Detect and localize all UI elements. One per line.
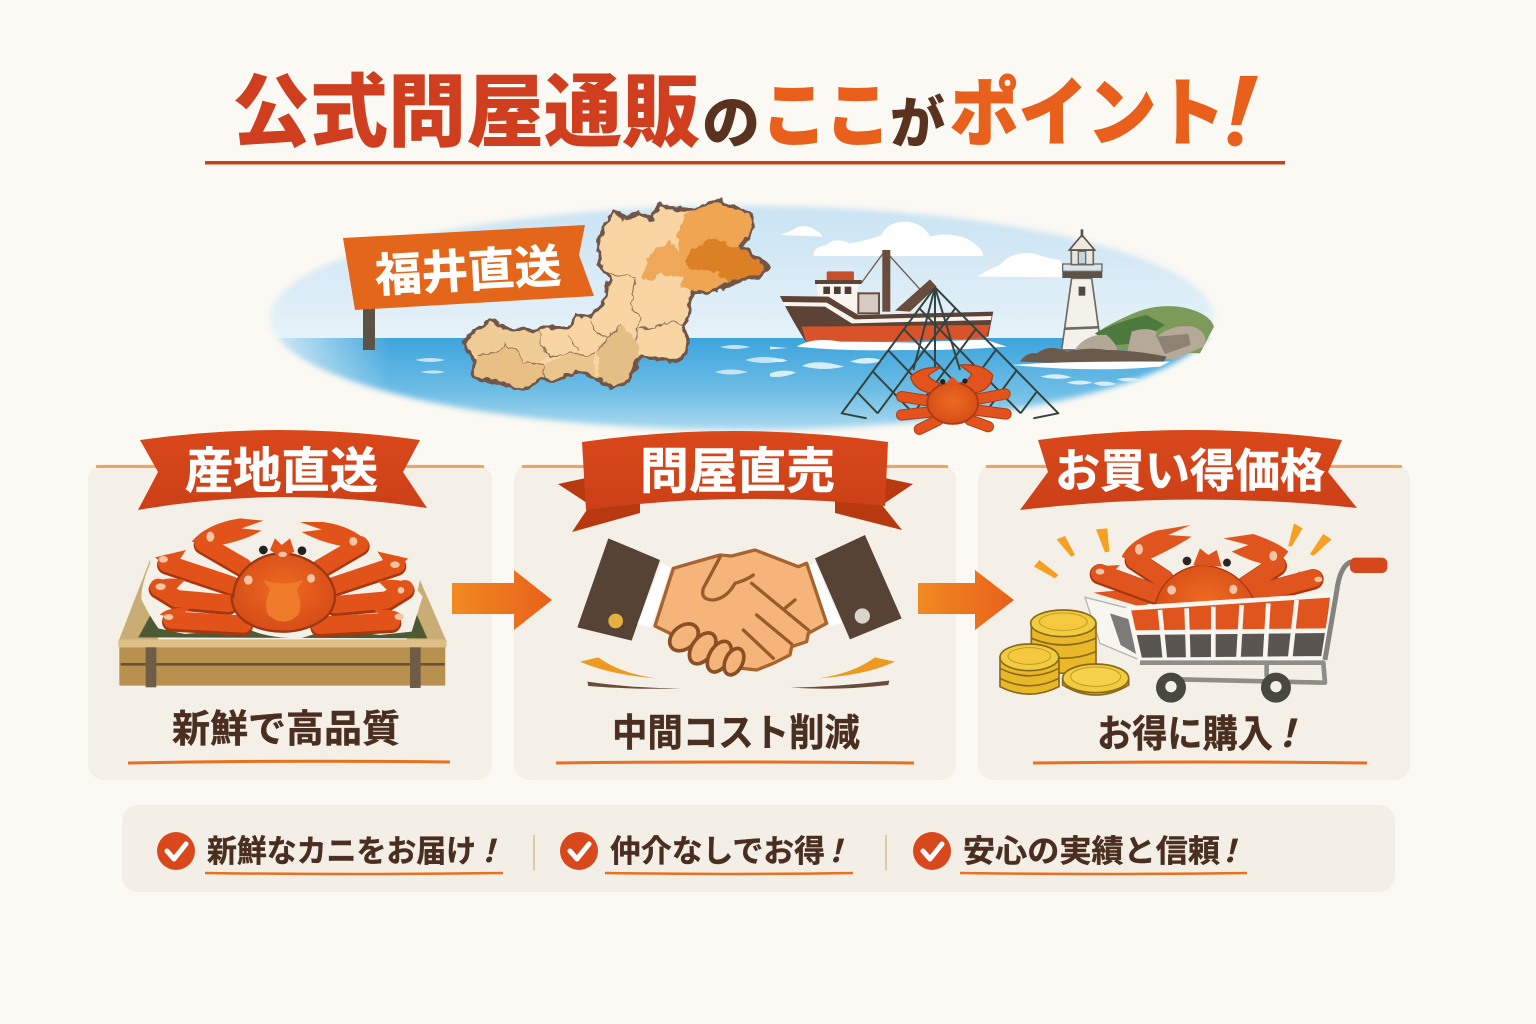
caption: buy at a bargain bbox=[1033, 714, 1367, 763]
title: ポイント bbox=[950, 72, 1225, 155]
lighthouse bbox=[1062, 229, 1102, 350]
benefit: fresh crab delivered bbox=[157, 832, 504, 874]
caption: buy at a bargain: お得に購入 bbox=[1097, 714, 1273, 756]
ribbon: bargain price: お買い得価格 bbox=[1055, 445, 1325, 497]
ribbon: wholesaler direct sale: 問屋直売 bbox=[640, 445, 835, 499]
benefit: reliable track record: 安心の実績と信頼 bbox=[963, 834, 1220, 869]
benefit: fresh crab delivered: ！ bbox=[473, 834, 504, 869]
caption: fresh and high quality: 新鮮で高品質 bbox=[172, 709, 400, 751]
benefit: savings without middleman: ！ bbox=[820, 834, 851, 869]
boat bbox=[780, 250, 1007, 350]
ribbon: wholesaler direct sale bbox=[558, 431, 913, 532]
map of Fukui bbox=[463, 200, 768, 390]
title: の bbox=[702, 91, 760, 156]
crab legs shadow bbox=[158, 545, 405, 627]
arrow: origin to wholesaler bbox=[452, 570, 552, 630]
sky and sea oval bbox=[260, 200, 1230, 436]
sign: Fukui direct: 福井直送 bbox=[374, 240, 562, 302]
title: ここ bbox=[762, 77, 890, 155]
wheels bbox=[1156, 673, 1291, 703]
arrow: wholesaler to bargain price bbox=[918, 570, 1014, 630]
benefit: savings without middleman bbox=[560, 832, 853, 874]
title bbox=[205, 68, 1285, 164]
benefit: fresh crab delivered: 新鮮なカニをお届け bbox=[207, 834, 476, 869]
benefit: reliable track record bbox=[913, 832, 1247, 874]
fishing net bbox=[842, 287, 1058, 418]
fishing boat, lighthouse and crab in net bbox=[770, 222, 1214, 429]
motion swooshes bbox=[580, 657, 895, 689]
island and rocks bbox=[1012, 306, 1214, 369]
crab legs bbox=[158, 543, 405, 625]
cart frame and handle bbox=[1325, 562, 1352, 660]
ribbon: bargain price bbox=[1020, 430, 1357, 510]
sign: Fukui direct bbox=[343, 225, 594, 350]
clouds bbox=[780, 222, 1070, 277]
icon: crab in shopping cart with coins bbox=[1000, 523, 1387, 703]
icon: handshake bbox=[577, 535, 902, 689]
caption: buy at a bargain: ！ bbox=[1268, 714, 1306, 756]
panel: benefits bar bbox=[122, 805, 1395, 892]
icon: crab on wooden box bbox=[118, 518, 447, 688]
panel: origin direct bbox=[88, 430, 492, 780]
panel: wholesaler direct sale bbox=[514, 431, 956, 780]
caption: middleman cost reduction: 中間コスト削減 bbox=[612, 713, 860, 755]
scene: Fukui sea illustration bbox=[260, 200, 1230, 436]
title: 公式問屋通販 bbox=[232, 68, 700, 157]
cart crab bbox=[1093, 525, 1323, 643]
cart basket bbox=[1130, 597, 1330, 633]
waves bbox=[770, 347, 1142, 386]
ribbon: origin direct bbox=[138, 430, 427, 510]
ribbon: origin direct: 産地直送 bbox=[185, 445, 378, 499]
benefit: reliable track record: ！ bbox=[1214, 834, 1245, 869]
waves beside the map bbox=[415, 345, 785, 374]
leg tips and claws bbox=[150, 518, 413, 619]
panel: bargain price bbox=[978, 430, 1410, 780]
sparkle rays bbox=[1034, 523, 1332, 578]
coins bbox=[1000, 610, 1129, 695]
title: が bbox=[890, 92, 945, 155]
crab in the net bbox=[902, 365, 1006, 429]
benefit: savings without middleman: 仲介なしでお得 bbox=[610, 834, 825, 869]
